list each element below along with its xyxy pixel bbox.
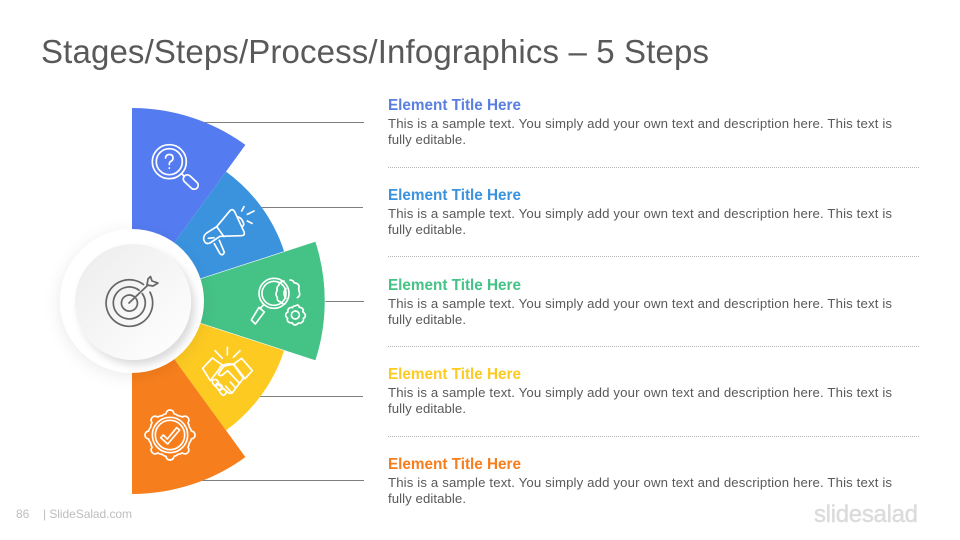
page number: 86 (16, 507, 30, 521)
description: This is a sample text. You simply add your own text and description here. This text is (388, 296, 892, 311)
title: Stages/Steps/Process/Infographics – 5 Steps (41, 33, 709, 70)
description: fully editable. (388, 312, 466, 327)
outer disc (60, 229, 204, 373)
inner disc (75, 244, 191, 360)
description: fully editable. (388, 132, 466, 147)
footer source: | SlideSalad.com (43, 507, 132, 521)
description: This is a sample text. You simply add your own text and description here. This text is (388, 475, 892, 490)
segment: step 1 blue (132, 108, 245, 301)
description: fully editable. (388, 222, 466, 237)
fan chart (132, 108, 325, 494)
segment: step 5 orange (132, 301, 245, 494)
description: This is a sample text. You simply add your own text and description here. This text is (388, 385, 892, 400)
step 3 text (388, 277, 892, 327)
heading: Element Title Here (388, 366, 521, 383)
icon: gear with check mark (145, 410, 195, 460)
step 1 text (388, 97, 892, 147)
description: fully editable. (388, 401, 466, 416)
icon: handshake (203, 347, 252, 395)
segment: step 2 light blue (132, 172, 284, 301)
icon: megaphone (204, 207, 254, 255)
segment: step 4 yellow (132, 301, 284, 430)
step 2 text (388, 187, 892, 237)
logo: slidesalad (814, 501, 918, 528)
icon: target with arrow (106, 276, 158, 326)
center medallion (60, 229, 204, 373)
heading: Element Title Here (388, 187, 521, 204)
description: fully editable. (388, 491, 466, 506)
description: This is a sample text. You simply add your own text and description here. This text is (388, 116, 892, 131)
icon: magnifier with question mark (152, 145, 200, 191)
leader lines (200, 122, 364, 480)
segment: step 3 green (132, 241, 325, 361)
heading: Element Title Here (388, 456, 521, 473)
step 4 text (388, 366, 892, 416)
description: This is a sample text. You simply add your own text and description here. This text is (388, 206, 892, 221)
heading: Element Title Here (388, 277, 521, 294)
icon: magnifier with gears (251, 278, 305, 325)
heading: Element Title Here (388, 97, 521, 114)
step 5 text (388, 456, 892, 506)
